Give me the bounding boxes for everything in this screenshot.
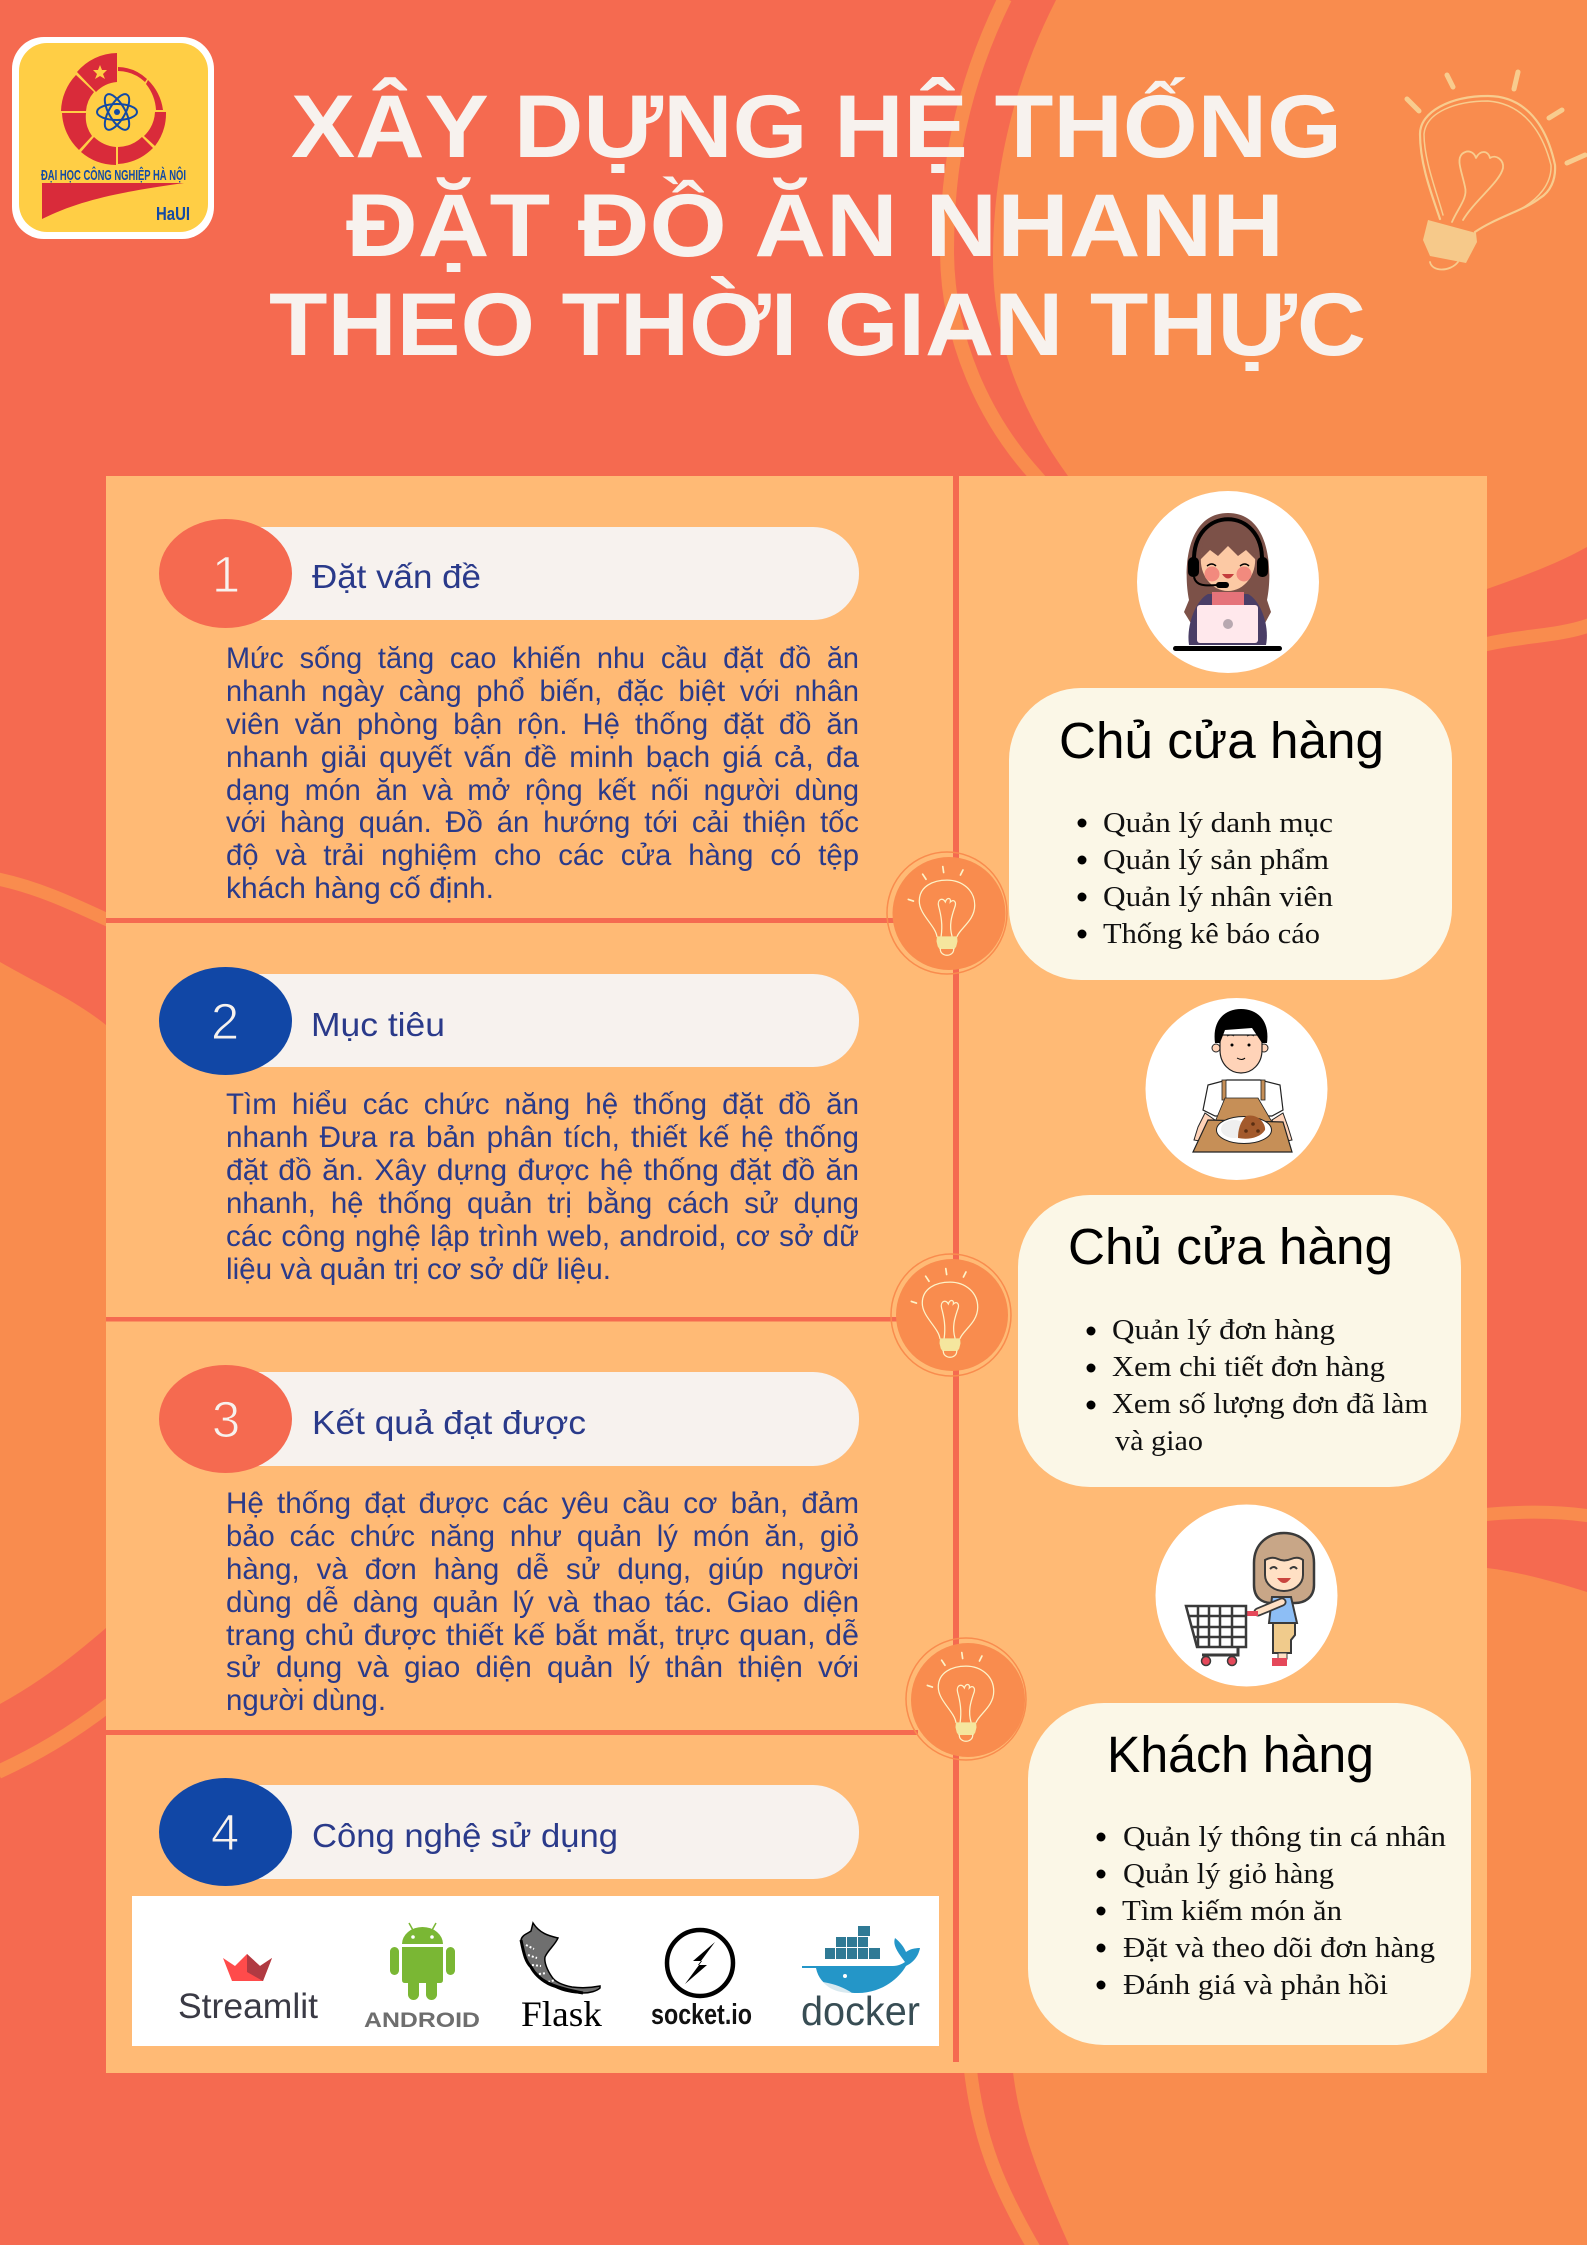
body text 3: bảo các chức năng như quản lý món ăn, giỏ: [226, 1520, 859, 1553]
section 4: technologies: [132, 1778, 939, 2046]
logo: Streamlit: Streamlit: [178, 1987, 318, 2026]
badge: bulb 1: [887, 852, 1007, 974]
technology logo box: [132, 1896, 939, 2046]
list: customer functions: Quản lý thông tin cá nhân: [1123, 1821, 1447, 1853]
heading pill 3: Kết quả đạt được: [312, 1404, 586, 1441]
list: store owner functions: Quản lý sản phẩm: [1103, 844, 1329, 876]
body text 3: [226, 1487, 859, 1717]
heading pill 1: [159, 519, 859, 628]
list: customer functions: [1096, 1821, 1447, 2001]
body text 2: đặt đồ ăn. Xây dựng được hệ thống đặt đồ ăn: [226, 1154, 859, 1187]
heading pill 3: 3: [212, 1391, 240, 1448]
avatar: customer with shopping cart: [1156, 1504, 1338, 1686]
logo: Streamlit: [178, 1954, 318, 2026]
badge: bulb 2: [891, 1254, 1011, 1376]
avatar: waiter with food tray: [1146, 998, 1328, 1180]
body text 2: [226, 1088, 859, 1286]
body text 3: hàng, và đơn hàng dễ sử dụng, giúp người: [226, 1553, 859, 1586]
body text 3: Hệ thống đạt được các yêu cầu cơ bản, đảm: [226, 1487, 859, 1520]
body text 1: [226, 642, 859, 905]
list: customer functions: Đánh giá và phản hồi: [1123, 1969, 1388, 2001]
body text 1: nhanh ngày càng phổ biến, đặc biệt với nhân: [226, 675, 859, 708]
icon: header light bulb: [1407, 72, 1585, 270]
body text 2: Tìm hiểu các chức năng hệ thống đặt đồ ăn: [226, 1088, 859, 1121]
body text 3: dùng dễ dàng quản lý và thao tác. Giao diện: [226, 1586, 859, 1619]
badge: bulb 3: [906, 1638, 1026, 1760]
body text 1: dạng món ăn và mở rộng kết nối người dùng: [226, 774, 859, 807]
body text 2: nhanh, hệ thống quản trị bằng cách sử dụng: [226, 1187, 859, 1220]
heading pill 3: [159, 1365, 859, 1473]
heading pill 1: 1: [212, 546, 240, 603]
logo: Hanoi University of Industry: [12, 37, 214, 239]
card: staff functions: Chủ cửa hàng: [1068, 1218, 1393, 1275]
body text 1: viên văn phòng bận rộn. Hệ thống đặt đồ ăn: [226, 708, 859, 741]
logo: Android: ANDROID: [364, 2009, 480, 2032]
heading pill 2: [159, 967, 859, 1075]
list: store owner functions: [1078, 807, 1334, 950]
section 3: results: [159, 1365, 859, 1717]
heading pill 4: [159, 1778, 859, 1886]
card: store owner functions: [1009, 688, 1452, 980]
logo: Hanoi University of Industry: ĐẠI HỌC CÔNG NGHIỆP HÀ NỘI: [41, 166, 186, 184]
body text 3: người dùng.: [226, 1684, 386, 1717]
title: XÂY DỰNG HỆ THỐNG: [291, 76, 1342, 176]
list: staff functions: [1086, 1314, 1428, 1457]
list: customer functions: Tìm kiếm món ăn: [1122, 1895, 1343, 1927]
body text 1: nhanh giải quyết vấn đề minh bạch giá cả, đa: [226, 741, 859, 774]
body text 2: liệu và quản trị cơ sở dữ liệu.: [226, 1253, 611, 1286]
heading pill 4: Công nghệ sử dụng: [312, 1817, 618, 1854]
body text 1: độ và trải nghiệm cho các cửa hàng có tệp: [226, 839, 859, 872]
card: customer functions: Khách hàng: [1107, 1726, 1374, 1783]
body text 2: các công nghệ lập trình web, android, cơ sở dữ: [226, 1220, 859, 1253]
list: staff functions: và giao: [1115, 1425, 1203, 1457]
section 2: objectives: [159, 967, 859, 1286]
title: ĐẶT ĐỒ ĂN NHANH: [346, 175, 1284, 275]
logo: Docker: [801, 1926, 920, 2034]
card: store owner functions: Chủ cửa hàng: [1059, 712, 1384, 769]
title: [269, 76, 1366, 374]
logo: Android: [364, 1923, 480, 2032]
logo: socket.io: [651, 1930, 752, 2031]
list: staff functions: Quản lý đơn hàng: [1112, 1314, 1335, 1346]
main panel: [106, 476, 1487, 2073]
title: THEO THỜI GIAN THỰC: [269, 274, 1366, 374]
body text 1: Mức sống tăng cao khiến nhu cầu đặt đồ ăn: [226, 642, 859, 675]
card: staff functions: [1018, 1195, 1461, 1487]
logo: Flask: Flask: [521, 1994, 602, 2034]
list: customer functions: Quản lý giỏ hàng: [1123, 1858, 1334, 1890]
logo: Docker: docker: [801, 1988, 920, 2034]
body text 1: khách hàng cố định.: [226, 872, 494, 905]
list: store owner functions: Quản lý danh mục: [1103, 807, 1333, 839]
body text 3: sử dụng và giao diện quản lý thân thiện với: [226, 1651, 859, 1684]
card: customer functions: [1028, 1703, 1471, 2045]
body text 3: trang chủ được thiết kế bắt mắt, trực quan, dễ: [226, 1619, 859, 1652]
heading pill 2: Mục tiêu: [311, 1006, 445, 1043]
section 1: problem statement: [159, 519, 859, 905]
logo: socket.io: socket.io: [651, 1999, 752, 2031]
body text 1: với hàng quán. Đồ án hướng tới cải thiện tốc: [226, 806, 859, 839]
list: store owner functions: Quản lý nhân viên: [1103, 881, 1334, 913]
heading pill 1: Đặt vấn đề: [312, 558, 481, 595]
list: staff functions: Xem chi tiết đơn hàng: [1112, 1351, 1385, 1383]
heading pill 4: 4: [211, 1804, 239, 1861]
logo: Flask: [521, 1923, 602, 2034]
logo: Hanoi University of Industry: HaUI: [156, 204, 190, 224]
list: staff functions: Xem số lượng đơn đã làm: [1112, 1388, 1428, 1420]
heading pill 2: 2: [211, 993, 239, 1050]
list: customer functions: Đặt và theo dõi đơn hàng: [1123, 1932, 1435, 1964]
body text 2: nhanh Đưa ra bản phân tích, thiết kế hệ thống: [226, 1121, 859, 1154]
avatar: store owner with headset: [1137, 491, 1319, 673]
list: store owner functions: Thống kê báo cáo: [1103, 918, 1320, 950]
